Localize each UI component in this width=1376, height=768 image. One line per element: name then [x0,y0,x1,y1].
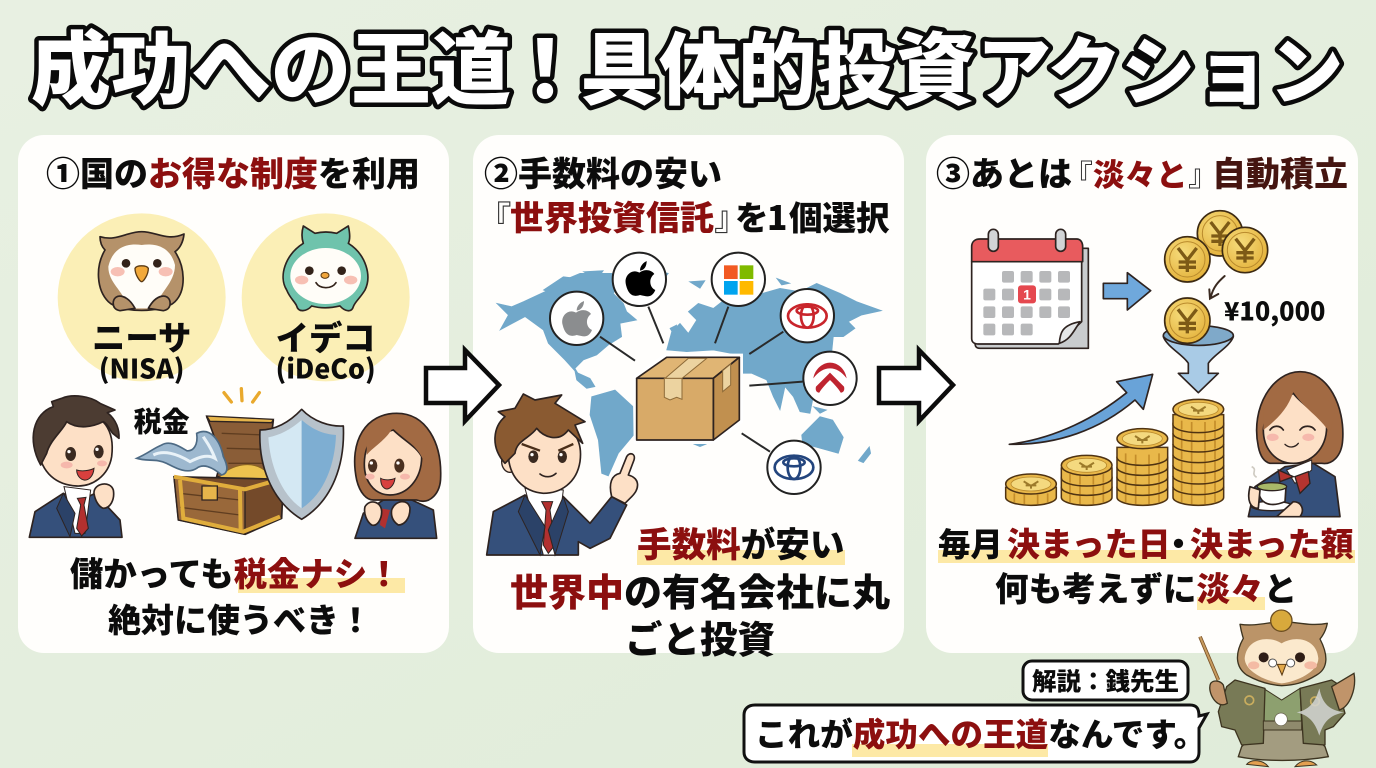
label: monthly amount: ¥10,000 [1224,292,1325,328]
character: pointing man [487,394,638,555]
panel 2 illustrations [487,253,882,555]
cheeks [1248,661,1317,669]
panel 2 heading [478,147,890,240]
heading line two: 』 [714,191,748,240]
character: woman in blazer [355,413,441,538]
title: 成功への王道 [31,6,511,122]
sparkle [1297,688,1344,736]
highlight [852,744,1048,757]
panel 3 illustrations [972,211,1343,517]
line one: ・ [1162,518,1195,566]
panel 1 heading: ①国のお得な制度を利用 [46,147,420,196]
panel 3 heading: 』 [1188,151,1218,195]
character: woman with tea [1248,372,1343,517]
line three: ごと投資 [625,609,775,664]
icon: tax water splash [137,432,227,475]
arrow: growth curve [1009,374,1153,444]
label: NISA katakana: ニーサ [92,311,191,360]
connector lines [600,307,803,452]
label: iDeCo katakana: イデコ [276,311,376,360]
line two: 何も考えずに淡々と [995,562,1297,611]
icon: funnel [1163,298,1233,393]
icon: global fund box [634,355,742,443]
panel 3 heading: 淡々と [1093,150,1188,196]
heading line two: 個選択 [789,191,890,240]
panel 3 heading: 『 [1063,151,1093,195]
heading line one: ②手数料の安い [484,147,722,196]
highlight [637,550,845,565]
label box [1023,661,1188,700]
panel 1 background [18,135,449,653]
label: NISA latin: (NISA) [99,347,184,386]
under-robe [1263,688,1302,727]
title: 具体的投資 [580,6,975,121]
panel 2 body text [510,517,890,664]
hat coin [1271,610,1292,631]
line one: 決まった額 [1190,518,1354,566]
icon: calendar [972,229,1088,348]
panel 1: national tax-free schemes [18,135,449,653]
arrow: calendar to coins [1103,273,1151,310]
bubble text: これが成功への王道なんです。 [755,709,1206,756]
arrow: small curved [1209,276,1225,299]
logo: grey apple [550,292,603,345]
panel 3 heading: 自動積立 [1212,147,1348,196]
line two: 世界中の有名会社に丸 [510,562,890,617]
panel 3: automatic accumulation [926,135,1358,653]
pointer stick [1200,637,1218,680]
arrow: panel 1 to panel 2 [426,350,499,421]
label: tax: 税金 [134,400,190,440]
line two: 絶対に使うべき！ [108,594,372,642]
icon: calendar: 1 [1023,286,1031,302]
panel 3 background [926,135,1358,653]
obi and knot [1263,713,1302,730]
icon: shield [260,409,343,519]
line one: 毎月 [938,519,1003,566]
icon: NISA owl [98,232,184,311]
logo: navy oval emblem [767,441,821,494]
character: owl teacher [1200,610,1355,767]
highlight [238,578,405,593]
coin stack 3 [1117,429,1168,505]
panel 3 body text [938,518,1355,611]
heading line two: 『 [478,191,512,240]
label text: 解説：銭先生 [1032,663,1179,698]
owl head [1237,622,1327,686]
kimono left [1218,680,1265,745]
title: ！ [505,6,585,122]
arrow: panel 2 to panel 3 [879,350,953,421]
line one: 決まった日 [1007,518,1171,566]
coin stack 1 [1006,474,1056,505]
icon: sparkle rays [224,389,259,402]
logo: red arch mark [803,352,857,405]
hakama [1238,725,1328,760]
iDeCo badge circle [242,213,410,381]
panel 1 body text [70,547,405,642]
line one: 儲かっても税金ナシ！ [70,547,401,596]
heading line two: を [735,191,768,240]
speech bubble [744,705,1207,762]
logo: red oval emblem [781,289,834,342]
character: man in suit [29,396,122,537]
logo: four-colour squares [712,253,765,306]
coin stack 4 [1173,399,1224,505]
crest dot right [1311,697,1319,706]
NISA badge circle [58,213,226,381]
spectacles [1269,659,1295,667]
presenter label [1023,661,1188,700]
icon: treasure chest [174,416,283,534]
line one: 手数料が安い [637,517,844,567]
world map [497,270,882,476]
bubble outline [744,705,1207,762]
highlight line two [1197,597,1265,610]
coin stack 2 [1061,455,1112,505]
panel 2: low-cost global fund [473,135,904,664]
crest dots [1245,696,1254,705]
kimono right [1300,680,1345,745]
label: iDeCo latin: (iDeCo) [276,347,376,386]
logo: black apple [613,253,666,306]
beak [1277,664,1286,675]
panel 3 heading: ③あとは [936,147,1072,196]
icon: iDeCo mascot [283,226,368,311]
feet [1247,761,1317,767]
heading line two: 世界投資信託 [510,191,714,240]
heading line two: 1 [767,191,787,240]
icon: falling yen coins [1165,211,1268,282]
stick highlight [1200,637,1218,680]
owl eyes [1259,652,1305,662]
owl face [1245,639,1318,683]
wings [1210,673,1355,710]
panel 2 background [473,135,904,653]
highlight line one [938,550,1355,563]
panel 1 illustrations [29,213,441,538]
title: アクション [977,13,1343,120]
